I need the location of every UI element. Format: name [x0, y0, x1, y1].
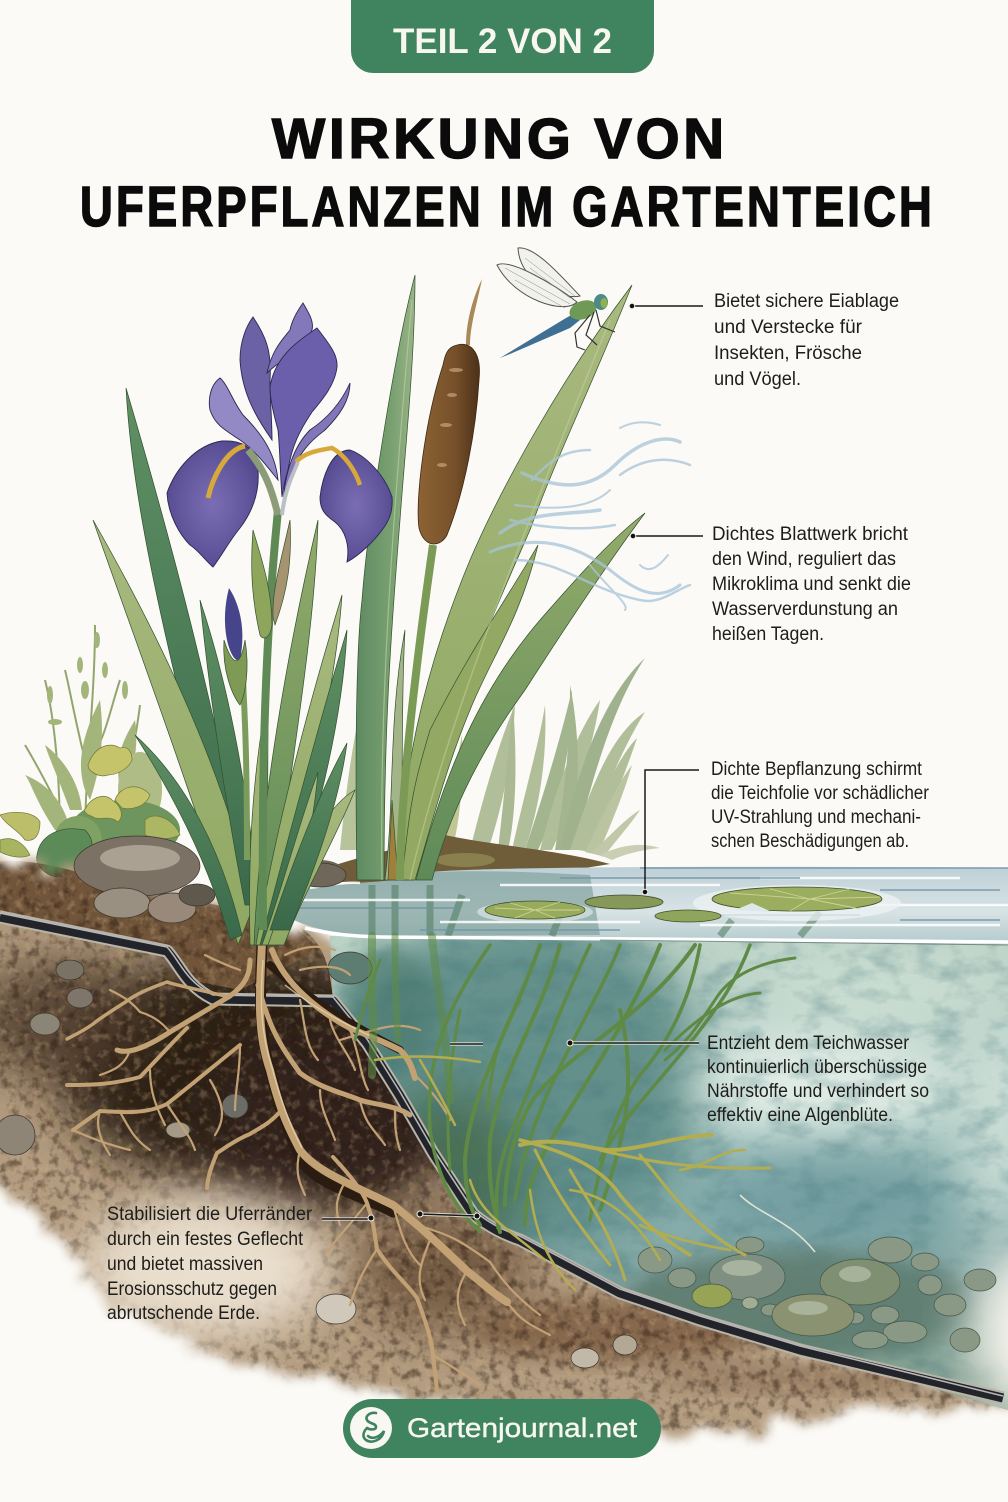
stones on bank and in soil	[0, 836, 637, 1368]
title	[80, 107, 935, 239]
water surface	[285, 867, 1008, 945]
callout: wind and microclimate	[712, 524, 911, 645]
callout: wind and microclimate: Wasserverdunstung an	[712, 599, 898, 620]
callout: nutrients: kontinuierlich überschüssige	[707, 1057, 927, 1078]
iris bud	[224, 588, 247, 705]
callout: wind and microclimate: Mikroklima und senkt die	[712, 574, 911, 595]
soil body	[0, 840, 1008, 1480]
far bank soil	[296, 835, 610, 885]
callout: habitat	[714, 291, 899, 390]
badge: part indicator: TEIL 2 VON 2	[393, 22, 612, 61]
callout: erosion protection: durch ein festes Geflecht	[107, 1229, 304, 1250]
callout: liner protection: schen Beschädigungen ab.	[711, 831, 909, 852]
title: WIRKUNG VON	[272, 107, 728, 171]
reed clump: tall leaves	[356, 275, 645, 880]
callout: wind and microclimate: den Wind, reguliert das	[712, 549, 896, 570]
pebbles on pond floor	[638, 1237, 996, 1352]
callout: wind and microclimate: Dichtes Blattwerk bricht	[712, 524, 909, 545]
callout: erosion protection: und bietet massiven	[107, 1254, 263, 1275]
cattail stem	[400, 545, 433, 880]
iris plant	[93, 303, 392, 945]
left bank shrubs	[0, 625, 180, 877]
submerged plants	[355, 936, 815, 1290]
cattail head	[418, 279, 482, 544]
badge: part indicator	[351, 0, 654, 73]
iris flower	[167, 303, 392, 567]
callout: erosion protection	[107, 1204, 313, 1324]
callout: habitat: und Vögel.	[714, 369, 801, 390]
callout: liner protection: die Teichfolie vor schädlicher	[711, 783, 930, 804]
callout: nutrients	[707, 1033, 929, 1126]
lily pads	[477, 885, 901, 923]
iris stem	[263, 510, 278, 930]
callout: liner protection: Dichte Bepflanzung schirmt	[711, 759, 923, 780]
callout: nutrients: effektiv eine Algenblüte.	[707, 1105, 893, 1126]
callout lines and dots	[322, 303, 703, 1221]
callout: liner protection: UV-Strahlung und mechani-	[711, 807, 921, 828]
callout: erosion protection: Stabilisiert die Uferränder	[107, 1204, 313, 1225]
callout: wind and microclimate: heißen Tagen.	[712, 624, 824, 645]
callout: habitat: Bietet sichere Eiablage	[714, 291, 899, 312]
pond liner	[0, 913, 1003, 1398]
callout: habitat: und Verstecke für	[714, 317, 863, 338]
root system	[67, 942, 550, 1390]
footer badge: Gartenjournal.net	[343, 1399, 661, 1458]
wind swirls	[490, 422, 690, 610]
callout: nutrients: Nährstoffe und verhindert so	[707, 1081, 929, 1102]
callout: liner protection	[711, 759, 930, 852]
footer badge: Gartenjournal.net: Gartenjournal.net	[407, 1413, 638, 1443]
background grass on far bank	[340, 658, 660, 860]
callout: erosion protection: abrutschende Erde.	[107, 1303, 260, 1324]
pond water	[320, 910, 1008, 1420]
callout: nutrients: Entzieht dem Teichwasser	[707, 1033, 910, 1054]
callout: erosion protection: Erosionsschutz gegen	[107, 1279, 277, 1300]
dragonfly	[497, 248, 615, 358]
callout: habitat: Insekten, Frösche	[714, 343, 862, 364]
